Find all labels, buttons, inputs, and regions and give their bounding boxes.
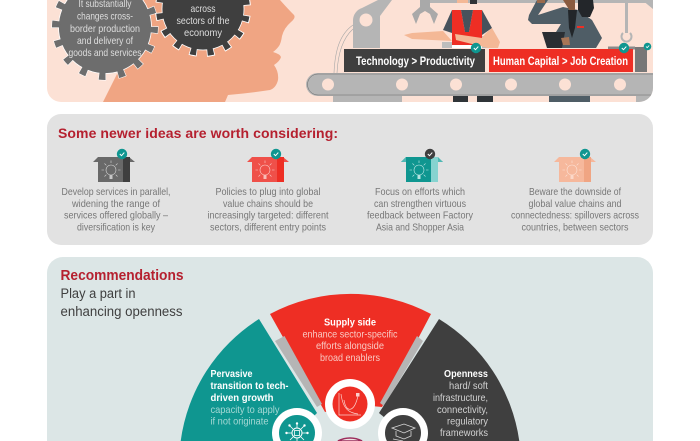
wedge: supply side: enhance sector-specific [302, 328, 398, 340]
wedge: pervasive transition [181, 319, 322, 441]
gear: cross-border production: border production [70, 23, 140, 35]
wedge: pervasive transition: if not originate [210, 416, 269, 428]
label: technology productivity: Technology > Productivity [356, 56, 475, 68]
wedge: openness: infrastructure, [433, 392, 488, 404]
text: targeted policies: Policies to plug into global [216, 186, 320, 198]
icon: grey idea box [93, 149, 135, 182]
icon: teal idea box [401, 149, 443, 182]
icon: network chip [272, 408, 322, 441]
gear: across sectors of the economy [155, 0, 251, 57]
text: diversification: diversification is key [77, 222, 156, 234]
text: spillovers: Beware the downside of [529, 186, 621, 198]
text: targeted policies: value chains should be [223, 198, 313, 210]
head silhouette [103, 0, 295, 102]
conveyor belt [306, 73, 653, 96]
label: human capital job creation: Human Capital > Job Creation [493, 56, 628, 68]
wedge: pervasive transition: driven growth [210, 392, 274, 404]
icon: graduation cap and books [378, 408, 428, 441]
text: diversification: widening the range of [71, 198, 160, 210]
centre icon ring [338, 438, 362, 441]
text: diversification: services offered globally – [64, 210, 168, 222]
gear: cross-border production: changes cross- [77, 10, 133, 22]
subheading: enhancing openness [60, 304, 183, 319]
text: spillovers [511, 186, 639, 234]
text: spillovers: global value chains and [528, 198, 622, 210]
wedge: openness: Openness [444, 368, 488, 380]
wedge: supply side: broad enablers [320, 352, 380, 364]
gear: across sectors of the economy: sectors of the [176, 15, 230, 27]
text: targeted policies [208, 186, 329, 234]
small crate [608, 46, 647, 72]
label: technology productivity [344, 49, 485, 72]
text: virtuous feedback: Focus on efforts which [375, 186, 465, 198]
wedge: openness: hard/ soft [449, 380, 488, 392]
wedge: supply side: efforts alongside [316, 340, 384, 352]
heading: Some newer ideas are worth considering: [58, 125, 338, 141]
icon: red idea box [247, 149, 289, 182]
label: human capital job creation [489, 49, 633, 72]
wedge: pervasive transition: transition to tech- [210, 380, 289, 392]
robot arm [334, 0, 392, 73]
text: spillovers: countries, between sectors [522, 222, 628, 234]
gear: cross-border production: and delivery of [77, 35, 133, 47]
panel: newer ideas [47, 114, 653, 245]
text: virtuous feedback [367, 186, 474, 234]
text: targeted policies: increasingly targeted: different [208, 210, 329, 222]
conveyor legs [333, 96, 653, 102]
subheading: Play a part in [60, 286, 136, 301]
wedge: openness: connectivity, [437, 404, 488, 416]
icon: curve chart [325, 379, 375, 429]
text: diversification [62, 186, 170, 234]
gear: cross-border production [54, 0, 156, 78]
wedge: pervasive transition: Pervasive [210, 368, 253, 380]
panel: technology and human capital [47, 0, 653, 102]
wedge: openness: regulatory [447, 416, 489, 428]
text: virtuous feedback: feedback between Factory [367, 210, 474, 222]
panel: recommendations [47, 257, 653, 441]
overhead rail and gripper [412, 0, 653, 42]
wedge: openness [378, 319, 519, 441]
check badges [471, 43, 651, 53]
worker: woman with tablet [528, 0, 602, 102]
icon: peach idea box [554, 149, 596, 182]
gear: across sectors of the economy: across [190, 3, 216, 15]
worker: man in red vest [404, 0, 500, 102]
wedge: pervasive transition: capacity to apply [210, 404, 280, 416]
subheading [60, 286, 183, 319]
wedge: openness: frameworks [440, 427, 488, 439]
text: spillovers: connectedness: spillovers across [511, 210, 639, 222]
gear: cross-border production: goods and services [68, 47, 142, 59]
text: virtuous feedback: can strengthen virtuous [374, 198, 466, 210]
wedge: supply side [270, 294, 431, 429]
text: targeted policies: sectors, different entry points [210, 222, 326, 234]
text: diversification: Develop services in parallel, [62, 186, 170, 198]
gear: across sectors of the economy: economy [184, 27, 223, 39]
text: virtuous feedback: Asia and Shopper Asia [376, 222, 464, 234]
wedge: supply side: Supply side [324, 316, 376, 328]
heading: recommendations: Recommendations [60, 267, 184, 284]
